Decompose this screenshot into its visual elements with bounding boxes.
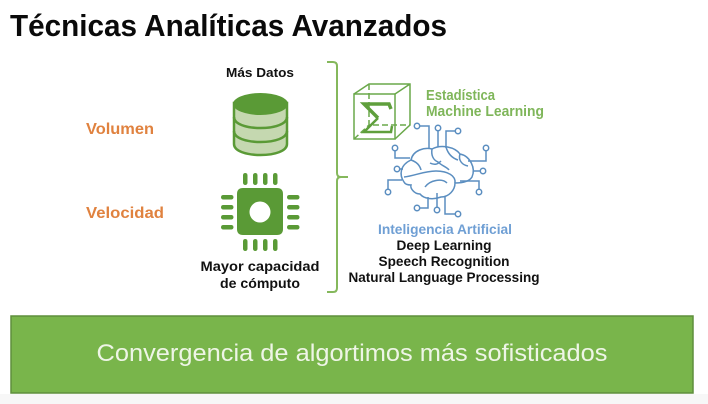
icon: processor chip xyxy=(221,173,300,251)
banner: convergence xyxy=(11,316,693,393)
brain outline xyxy=(401,147,473,199)
list: AI techniques: Speech Recognition xyxy=(378,253,510,269)
label: Volumen: Volumen xyxy=(86,121,154,138)
label: Mayor capacidad de cómputo: de cómputo xyxy=(220,275,300,291)
label: Mayor capacidad de cómputo: Mayor capacidad xyxy=(200,258,320,274)
label: Estadística Machine Learning: Estadística xyxy=(426,88,496,104)
label: Mayor capacidad de cómputo xyxy=(200,258,320,291)
icon: circuit brain xyxy=(385,123,489,217)
label: Estadística Machine Learning xyxy=(426,88,544,120)
label: Estadística Machine Learning: Machine Learning xyxy=(426,104,544,120)
list: AI techniques xyxy=(348,237,540,285)
circuit lines xyxy=(388,126,486,214)
label: Más Datos: Más Datos xyxy=(226,65,294,80)
list: AI techniques: Deep Learning xyxy=(396,237,492,253)
icon: database xyxy=(233,93,288,155)
banner: convergence: Convergencia de algortimos más sofisticados xyxy=(96,340,608,367)
bracket xyxy=(327,62,348,292)
title: Técnicas Analíticas Avanzados xyxy=(10,8,447,43)
brain folds xyxy=(404,147,468,187)
label: Inteligencia Artificial: Inteligencia Artificial xyxy=(378,221,512,237)
icon: sigma cube xyxy=(354,84,410,139)
list: AI techniques: Natural Language Processing xyxy=(348,269,540,285)
circuit nodes xyxy=(385,123,489,217)
label: Velocidad: Velocidad xyxy=(86,205,164,222)
